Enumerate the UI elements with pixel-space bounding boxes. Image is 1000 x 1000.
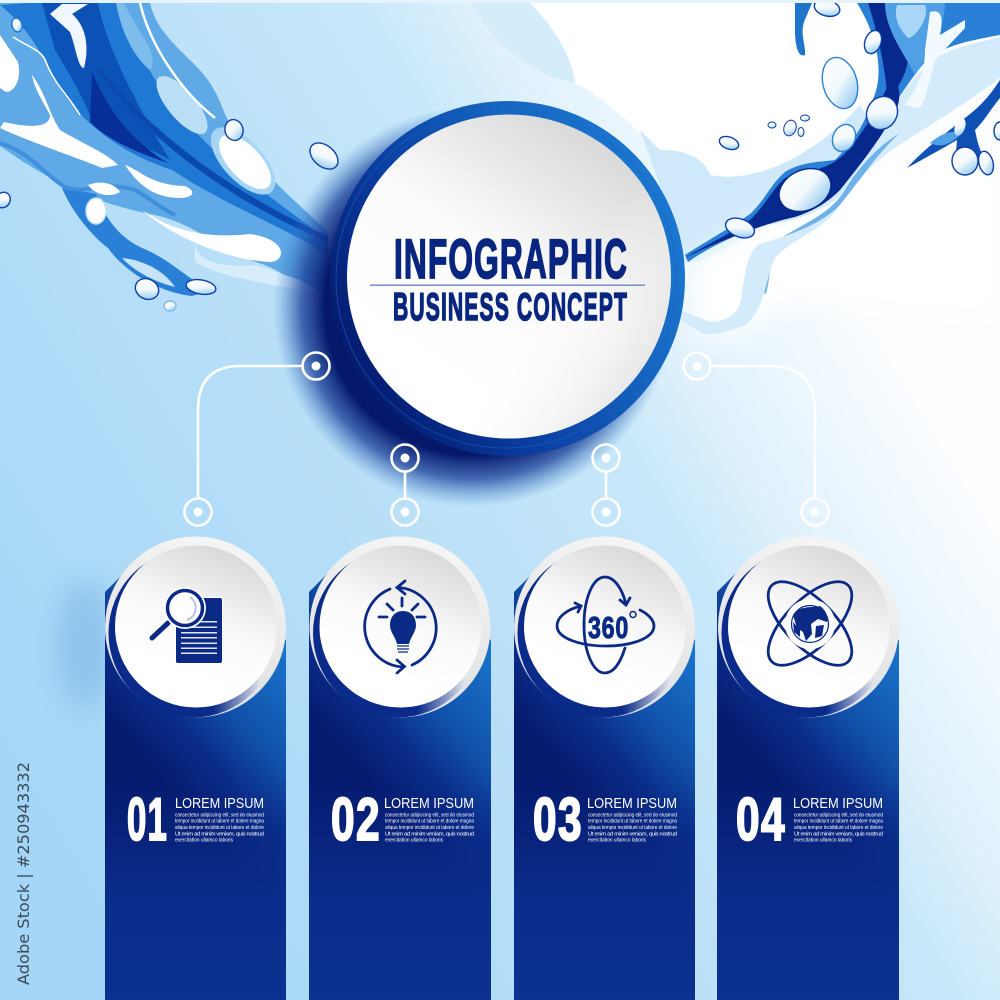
card 4 text: tempor incididunt ut labore et dolore magna <box>794 819 884 825</box>
icon: globe with orbits <box>755 568 865 679</box>
card 1 text: tempor incididunt ut labore et dolore magna <box>175 819 265 825</box>
connectors <box>184 352 828 526</box>
main circle <box>330 101 685 456</box>
card 3 text: tempor incididunt ut labore et dolore magna <box>588 819 678 825</box>
card 1 text: aliqua tempor incididunt ut labore et dolore <box>175 825 264 831</box>
card 4 text: exercitation ullamco laboris <box>794 838 852 844</box>
card 1 text: consectetur adipiscing elit, sed do eiusmod <box>175 812 264 818</box>
card 1 text: 01 <box>127 786 168 853</box>
card 2 text: LOREM IPSUM <box>384 795 474 812</box>
card 3 text <box>533 786 678 853</box>
column 1 bar <box>105 562 286 1000</box>
soft shadow left of first column <box>57 580 113 710</box>
column 3 bar <box>514 562 695 1000</box>
card 2 text: tempor incididunt ut labore et dolore magna <box>385 819 475 825</box>
card 3 text: consectetur adipiscing elit, sed do eiusmod <box>588 812 677 818</box>
card 1 text: Ut enim ad minim veniam, quis nostrud <box>175 831 264 837</box>
card 3 text: aliqua tempor incididunt ut labore et dolore <box>588 825 677 831</box>
side credit text: Adobe Stock | #250943332 <box>14 762 33 985</box>
white zone under right splash <box>690 100 1000 335</box>
card 1 text: exercitation ullamco laboris <box>175 838 233 844</box>
card 2 text <box>331 786 475 853</box>
icon: 360 degree rotation <box>557 577 654 673</box>
card 3 text: LOREM IPSUM <box>587 795 677 812</box>
white wash top right <box>472 3 1000 262</box>
card 3 text: exercitation ullamco laboris <box>588 838 646 844</box>
card 4 text <box>736 786 884 853</box>
card 4 text: aliqua tempor incididunt ut labore et dolore <box>794 825 883 831</box>
card 4 text: consectetur adipiscing elit, sed do eiusmod <box>794 812 883 818</box>
card 2 text: 02 <box>331 786 381 853</box>
card 2 circle <box>310 536 490 718</box>
water splash: right <box>677 3 1000 334</box>
title <box>370 227 645 329</box>
icon: magnifier over document <box>152 587 223 664</box>
card 4 text: Ut enim ad minim veniam, quis nostrud <box>794 831 883 837</box>
title: BUSINESS CONCEPT <box>393 286 628 329</box>
card 3 text: 03 <box>533 786 583 853</box>
card 2 text: Ut enim ad minim veniam, quis nostrud <box>385 831 474 837</box>
card 1 text <box>127 786 265 853</box>
water splash: left <box>0 3 332 298</box>
title: INFOGRAPHIC <box>394 227 628 290</box>
icon: 360 degree rotation: 360 <box>588 610 629 645</box>
card 2 text: aliqua tempor incididunt ut labore et dolore <box>385 825 474 831</box>
card 3 text: Ut enim ad minim veniam, quis nostrud <box>588 831 677 837</box>
icon: light bulb in cycle arrows <box>365 581 436 673</box>
card 2 text: consectetur adipiscing elit, sed do eiusmod <box>385 812 474 818</box>
card 4 text: LOREM IPSUM <box>793 795 883 812</box>
column 2 bar <box>309 562 491 1000</box>
card 3 circle <box>514 536 695 718</box>
card 2 text: exercitation ullamco laboris <box>385 838 443 844</box>
card 1 text: LOREM IPSUM <box>175 795 264 812</box>
card 4 circle <box>718 536 899 718</box>
column 4 bar <box>717 562 899 1000</box>
card 4 text: 04 <box>736 786 786 853</box>
top edge strip <box>0 0 1000 3</box>
water droplets <box>0 0 1000 311</box>
card 1 circle <box>105 536 286 718</box>
main circle shadow <box>273 107 673 507</box>
